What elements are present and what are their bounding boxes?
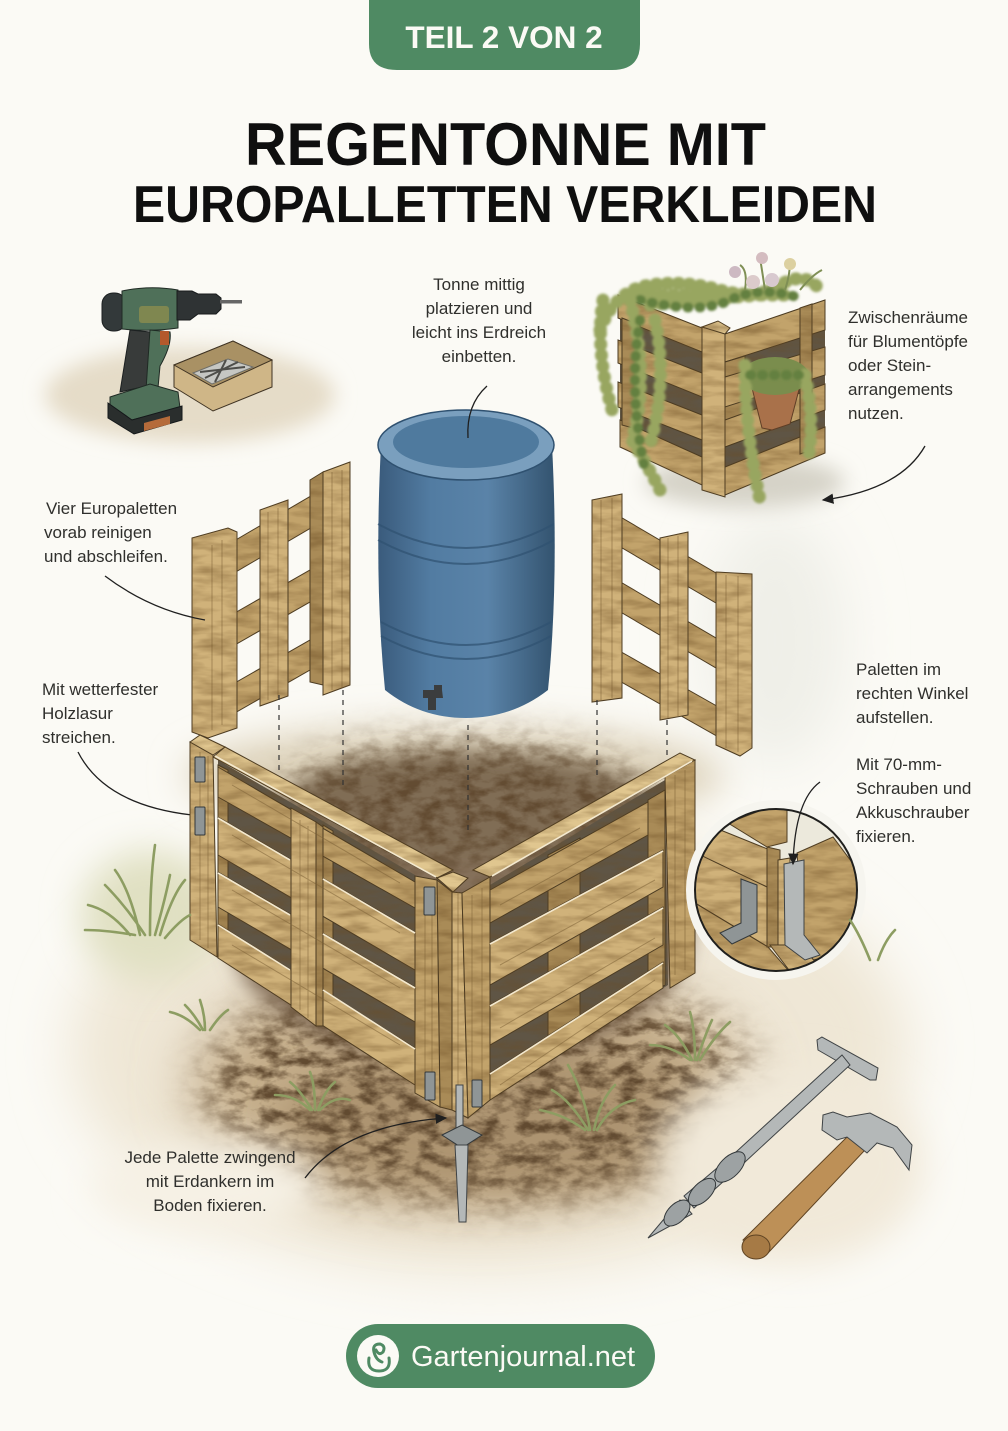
icon: right angle bracket — [784, 860, 820, 960]
badge: part 2 of 2: TEIL 2 VON 2 — [405, 19, 603, 55]
arrow: glaze — [78, 752, 192, 815]
detail loupe: bracket close-up — [686, 800, 866, 980]
planter example — [600, 252, 825, 500]
text: ground anchors: Boden fixieren. — [153, 1196, 267, 1215]
text: right angle: rechten Winkel — [856, 684, 968, 703]
text: right angle: Paletten im — [856, 660, 941, 679]
alignment dashed lines — [279, 690, 667, 830]
ground soil wash — [45, 347, 925, 1275]
text: clean pallets: Vier Europaletten — [46, 499, 177, 518]
footer badge: Gartenjournal.net — [346, 1324, 655, 1388]
text: clean pallets: vorab reinigen — [44, 523, 152, 542]
text: glaze: Mit wetterfester — [42, 680, 159, 699]
arrow: ground anchors — [305, 1118, 446, 1178]
grass tufts — [85, 845, 895, 1130]
arrow: planter — [823, 446, 925, 500]
text: place barrel: Tonne mittig — [433, 275, 525, 294]
text: screws: fixieren. — [856, 827, 916, 846]
text: place barrel: einbetten. — [442, 347, 516, 366]
text: right angle: aufstellen. — [856, 708, 934, 727]
assembled right pallet — [437, 753, 695, 1118]
metal corner brackets — [195, 757, 482, 1107]
arrow: screws — [793, 782, 820, 864]
footer badge: Gartenjournal.net: Gartenjournal.net — [411, 1341, 635, 1373]
text: screws: Schrauben und — [856, 779, 971, 798]
text: glaze: Holzlasur — [42, 704, 113, 723]
text: gaps for planters: nutzen. — [848, 404, 904, 423]
text: place barrel: platzieren und — [426, 299, 532, 318]
text: place barrel: leicht ins Erdreich — [412, 323, 546, 342]
text: ground anchors: Jede Palette zwingend — [124, 1148, 296, 1167]
text: clean pallets: und abschleifen. — [44, 547, 168, 566]
text: ground anchors: mit Erdankern im — [146, 1172, 274, 1191]
tools: auger anchor and hammer — [648, 1037, 912, 1259]
ground anchor in soil — [442, 1085, 482, 1222]
icon: left angle bracket — [720, 879, 757, 944]
floating right pallet — [592, 494, 752, 756]
title: EUROPALLETTEN VERKLEIDEN — [133, 176, 877, 234]
floating left pallet — [192, 462, 350, 738]
assembled left pallet — [190, 735, 453, 1110]
arrow: clean pallets — [105, 576, 205, 620]
text: screws: Mit 70-mm- — [856, 755, 942, 774]
text: gaps for planters: Zwischenräume — [848, 308, 968, 327]
text: gaps for planters: für Blumentöpfe — [848, 332, 968, 351]
barrel — [378, 410, 555, 718]
icon: logo circle — [357, 1335, 399, 1377]
badge: part 2 of 2 — [369, 0, 640, 70]
title — [133, 111, 877, 234]
text: screws: Akkuschrauber — [856, 803, 970, 822]
icon: cordless drill and screw box — [102, 288, 272, 434]
text: gaps for planters: oder Stein- — [848, 356, 931, 375]
text: gaps for planters: arrangements — [848, 380, 953, 399]
arrow: barrel — [468, 386, 487, 438]
title: REGENTONNE MIT — [245, 111, 766, 178]
text: glaze: streichen. — [42, 728, 116, 747]
